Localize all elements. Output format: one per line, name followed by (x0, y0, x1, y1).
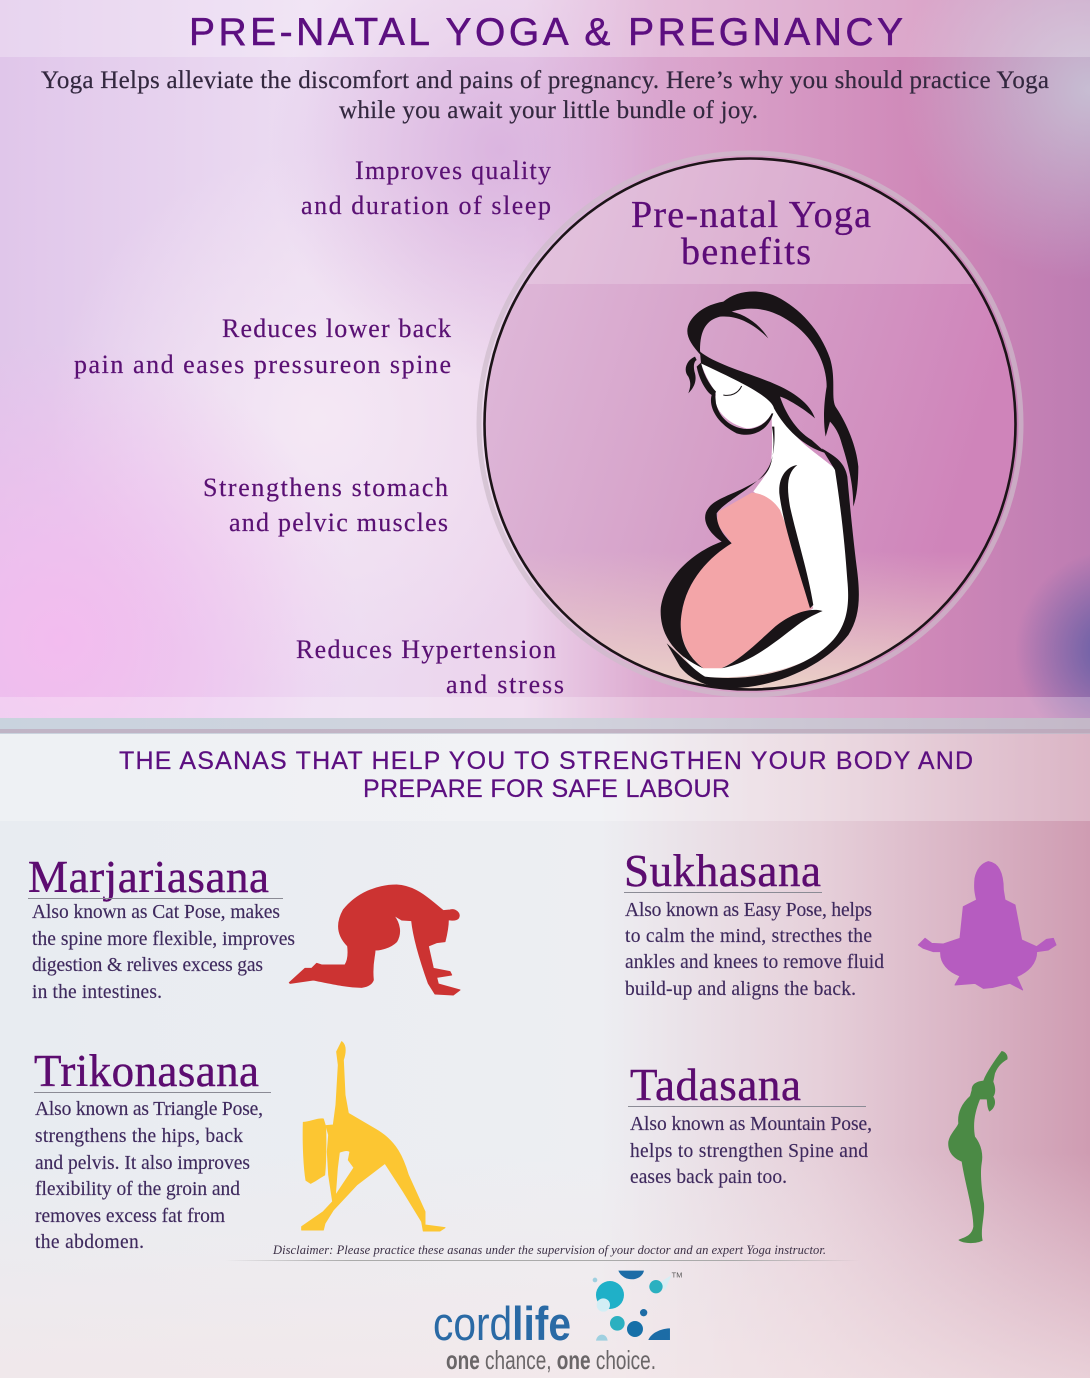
asana: Trikonasana: flexibility of the groin and (35, 1179, 240, 1200)
asana: Trikonasana: the abdomen. (35, 1232, 144, 1253)
benefit: hypertension: and stress (446, 670, 564, 699)
asana: Marjariasana: digestion & relives excess gas (32, 955, 263, 976)
panel: benefits background (0, 0, 1090, 718)
title: PRE-NATAL YOGA & PREGNANCY (189, 11, 903, 54)
asana: Trikonasana: Also known as Triangle Pose, (35, 1099, 263, 1120)
circle heading (631, 194, 871, 273)
circle heading: Pre-natal Yoga (631, 194, 871, 236)
asana: Sukhasana: build-up and aligns the back. (625, 979, 856, 1000)
asana: Marjariasana: Marjariasana (28, 852, 269, 902)
asana: Tadasana (628, 1060, 872, 1188)
asana: Sukhasana (624, 846, 884, 1000)
circle heading: benefits (681, 231, 811, 273)
icon: cat pose (289, 885, 460, 995)
benefit: stomach and pelvic muscles (203, 473, 448, 537)
logo mark (593, 1270, 682, 1341)
asana: Trikonasana (34, 1046, 271, 1253)
asana: Marjariasana: in the intestines. (32, 982, 162, 1003)
asana: Trikonasana: and pelvis. It also improves (35, 1153, 250, 1174)
asana: Marjariasana: Also known as Cat Pose, makes (32, 902, 280, 923)
asanas heading: THE ASANAS THAT HELP YOU TO STRENGTHEN YOUR BODY AND (119, 747, 973, 775)
asana: Tadasana: eases back pain too. (630, 1167, 787, 1188)
asana: Trikonasana: Trikonasana (34, 1046, 259, 1096)
intro text: Yoga Helps alleviate the discomfort and pains of pregnancy. Here’s why you should practice Yoga (41, 67, 1049, 94)
logo: cordlife: one chance, one choice. (446, 1345, 656, 1375)
logo: cordlife (433, 1270, 682, 1375)
benefit: hypertension: Reduces Hypertension (296, 635, 556, 664)
asana: Sukhasana: Sukhasana (624, 846, 821, 896)
asana: Marjariasana (28, 852, 295, 1003)
icon: pregnant woman (661, 291, 859, 688)
intro text (41, 67, 1049, 124)
icon: easy pose (918, 862, 1056, 990)
intro text: while you await your little bundle of joy. (339, 97, 758, 124)
asana: Tadasana: helps to strengthen Spine and (630, 1141, 868, 1162)
benefits circle (479, 150, 1021, 695)
disclaimer: Disclaimer: Please practice these asanas under the supervision of your doctor and an expert Yoga instructor. (272, 1243, 826, 1257)
icon: triangle pose (302, 1042, 445, 1231)
asana: Sukhasana: to calm the mind, strecthes the (625, 926, 872, 947)
asanas heading (119, 747, 973, 803)
asana: Sukhasana: ankles and knees to remove fluid (625, 952, 884, 973)
benefit: stomach and pelvic muscles: and pelvic muscles (229, 508, 448, 537)
asana: Tadasana: Also known as Mountain Pose, (630, 1114, 872, 1135)
asana: Marjariasana: the spine more flexible, improves (32, 929, 295, 950)
asana: Trikonasana: removes excess fat from (35, 1206, 225, 1227)
benefit: lower back: Reduces lower back (222, 314, 451, 343)
benefit: sleep (301, 156, 551, 220)
logo: cordlife: cordlife (433, 1297, 571, 1350)
benefit: lower back: pain and eases pressureon spine (74, 350, 451, 379)
benefit: lower back (74, 314, 451, 379)
asana: Sukhasana: Also known as Easy Pose, helps (625, 900, 872, 921)
asana: Tadasana: Tadasana (630, 1060, 801, 1110)
asanas heading: PREPARE FOR SAFE LABOUR (363, 775, 730, 803)
icon: mountain pose (948, 1051, 1008, 1243)
panel: asanas background (0, 718, 1090, 1378)
asana: Trikonasana: strengthens the hips, back (35, 1126, 243, 1147)
benefit: sleep: Improves quality (355, 156, 551, 185)
benefit: stomach and pelvic muscles: Strengthens stomach (203, 473, 448, 502)
logo mark: TM (672, 1270, 682, 1279)
benefit: sleep: and duration of sleep (301, 191, 551, 220)
benefit: hypertension (296, 635, 564, 699)
